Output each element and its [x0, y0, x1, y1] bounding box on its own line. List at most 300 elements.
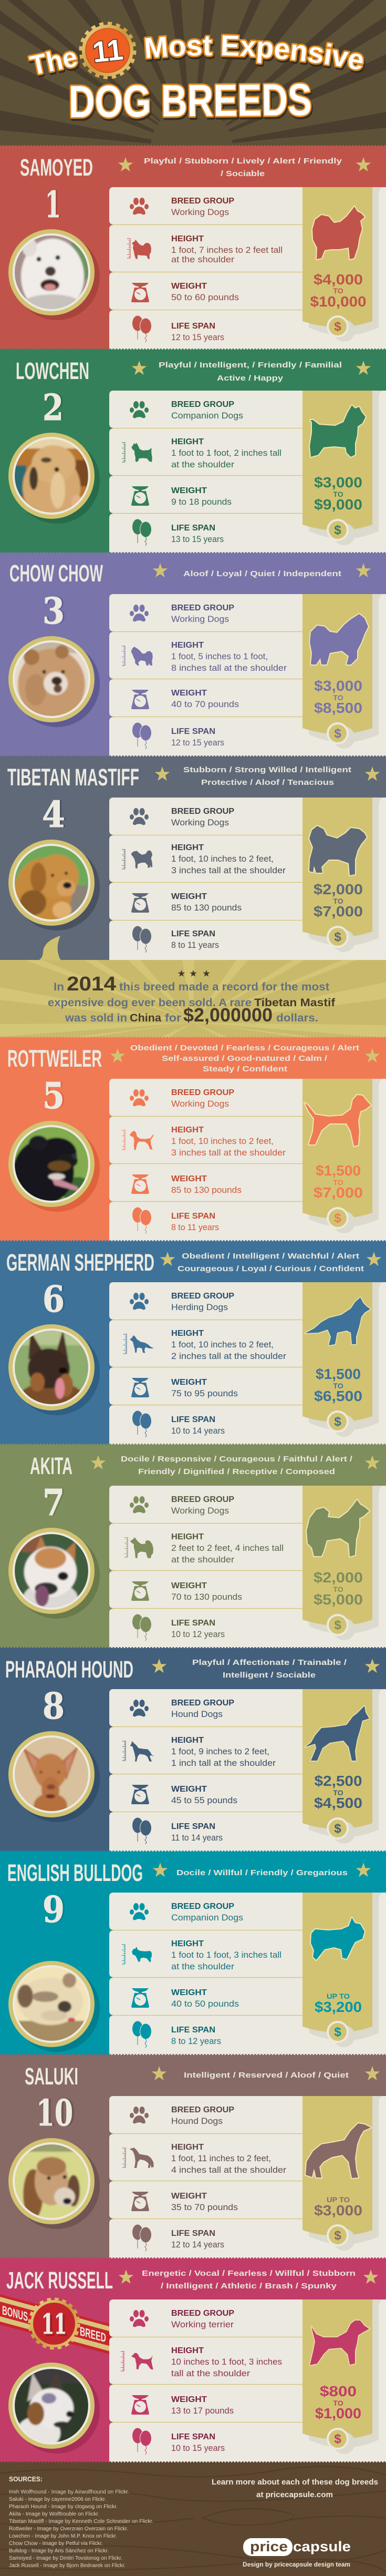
price: [314, 1162, 363, 1225]
price: $10,000: [310, 293, 367, 310]
section: Lowchen: [0, 350, 386, 559]
title: The 11 Most Expensive Dog Breeds: DOG BREEDS: [68, 75, 312, 127]
temperament traits: Self-assured / Good-natured / Calm /: [162, 1054, 328, 1063]
price: $: [334, 930, 341, 944]
learn more text: [212, 2478, 378, 2499]
weight: WEIGHT: [171, 486, 207, 495]
temperament traits: Intelligent / Reserved / Aloof / Quiet: [184, 2071, 349, 2080]
height: [171, 437, 281, 469]
price: [314, 678, 362, 741]
life span: 8 to 11 years: [171, 1223, 219, 1232]
temperament traits: [130, 1044, 359, 1074]
price: $4,000: [314, 271, 363, 288]
price: $: [334, 1211, 341, 1225]
rank number: 7: [43, 1482, 65, 1524]
icon: ruler and dog: [127, 238, 151, 259]
weight: 13 to 17 pounds: [171, 2406, 234, 2416]
star: [132, 361, 147, 375]
star: [356, 157, 371, 171]
sources list: [9, 2476, 153, 2569]
temperament traits: [121, 1455, 353, 1476]
height: HEIGHT: [171, 843, 204, 852]
section: Samoyed: [0, 146, 386, 355]
life span: LIFE SPAN: [171, 1415, 215, 1424]
star: [110, 1048, 125, 1062]
price: TO: [333, 1178, 343, 1187]
rank number: 6: [44, 1279, 66, 1321]
price: $5,000: [314, 1591, 363, 1608]
big dog silhouette: [310, 405, 366, 457]
callout: record sale fact: 2014: [67, 973, 116, 995]
icon: ruler and dog: [124, 1537, 153, 1558]
weight: [171, 486, 232, 507]
icon: scale: [131, 2192, 149, 2211]
logo: pricecapsule: capsule: [293, 2539, 351, 2554]
callout: record sale fact: Tibetan Mastif: [254, 997, 336, 1009]
price: $: [334, 1618, 341, 1632]
temperament traits: [142, 2269, 356, 2291]
callout: record sale fact: [0, 936, 386, 1041]
icon: balloons: [132, 722, 152, 749]
breed group: BREED GROUP: [171, 2105, 234, 2114]
price: [314, 2195, 362, 2243]
icon: ruler and dog: [122, 1130, 154, 1150]
temperament traits: Steady / Confident: [203, 1065, 287, 1074]
rank number: 8: [44, 1685, 66, 1727]
price: $7,000: [314, 903, 363, 919]
life span: [171, 2026, 221, 2046]
rank number: 3: [43, 590, 65, 632]
bonus breed ribbon: [0, 2294, 111, 2355]
section: English Bulldog: [0, 1852, 386, 2061]
icon: scale: [131, 283, 149, 302]
height: 2 feet to 2 feet, 4 inches tall: [171, 1543, 284, 1553]
height: 1 foot to 1 foot, 3 inches tall: [171, 1950, 281, 1960]
section: Saluki: [0, 2055, 386, 2264]
callout: record sale fact: China: [130, 1012, 161, 1024]
icon: paw: [130, 1700, 149, 1716]
weight: 45 to 55 pounds: [171, 1796, 237, 1805]
weight: [171, 2192, 238, 2212]
icon: paw: [130, 1496, 149, 1513]
star: [356, 1863, 371, 1877]
photo: Chow Chow: [8, 636, 100, 727]
weight: [171, 2395, 234, 2416]
icon: ruler and dog: [122, 1944, 152, 1964]
callout: record sale fact: dollars.: [276, 1012, 318, 1024]
temperament traits: Playful / Intelligent, / Friendly / Familial: [159, 361, 342, 370]
price: $3,000: [314, 2202, 362, 2219]
details card and price ribbon: [109, 187, 386, 355]
star: [365, 766, 380, 781]
breed name: ROTTWEILER: [7, 1045, 102, 1072]
star: [155, 766, 170, 781]
price: [314, 1569, 363, 1632]
sources list: Lowchen - Image by John M.P. Knox on Flickr.: [9, 2533, 117, 2539]
breed group: Hound Dogs: [171, 2117, 223, 2126]
icon: paw: [130, 2107, 149, 2123]
height: at the shoulder: [171, 1962, 235, 1971]
price: [310, 271, 367, 334]
life span: 12 to 15 years: [171, 738, 224, 748]
temperament traits: Docile / Responsive / Courageous / Faithful / Alert /: [121, 1455, 353, 1464]
height: HEIGHT: [171, 641, 204, 650]
life span: 12 to 14 years: [171, 2240, 224, 2250]
design credit: Design by pricecapsule design team: [243, 2562, 350, 2568]
temperament traits: Docile / Willful / Friendly / Gregarious: [176, 1868, 348, 1877]
icon: paw: [130, 1293, 149, 1310]
section: Jack Russell: [0, 2258, 386, 2468]
temperament traits: Intelligent / Sociable: [223, 1671, 316, 1680]
price: $6,500: [314, 1388, 362, 1404]
life span: LIFE SPAN: [171, 322, 215, 331]
icon: balloons: [132, 1818, 152, 1844]
photo: Akita: [8, 1528, 100, 1619]
price: TO: [333, 2399, 343, 2407]
photo: Saluki: [8, 2138, 100, 2229]
price: $2,000: [314, 881, 363, 897]
height: at the shoulder: [171, 255, 235, 264]
callout: record sale fact: $2,000000: [183, 1004, 273, 1026]
height: 1 foot, 10 inches to 2 feet,: [171, 1340, 274, 1350]
breed name: LOWCHEN: [16, 357, 89, 384]
weight: WEIGHT: [171, 1988, 207, 1997]
height: HEIGHT: [171, 2143, 204, 2152]
gold seal with rank 11: 11: [41, 2308, 67, 2340]
sources list: Bulldog - Image by Aris Sánchez on Flickr.: [9, 2548, 109, 2554]
rank number: 7: [44, 1482, 66, 1524]
callout: record sale fact: In: [54, 981, 64, 993]
temperament traits: Obedient / Intelligent / Watchful / Alert: [182, 1252, 359, 1261]
height: 1 foot, 7 inches to 2 feet tall: [171, 246, 283, 255]
life span: LIFE SPAN: [171, 1822, 215, 1831]
price: $: [334, 727, 341, 741]
photo: Rottweiler: [8, 1121, 100, 1212]
life span: LIFE SPAN: [171, 2026, 215, 2035]
photo: Samoyed: [8, 229, 100, 320]
breed group: Working terrier: [171, 2320, 234, 2329]
icon: scale: [131, 1581, 149, 1601]
height: 3 inches tall at the shoulder: [171, 1148, 286, 1158]
breed name: SAMOYED: [20, 154, 93, 181]
temperament traits: [159, 361, 342, 383]
height: HEIGHT: [171, 1939, 204, 1948]
star: [365, 1659, 380, 1673]
height: [171, 843, 286, 875]
height: 1 foot, 9 inches to 2 feet,: [171, 1747, 269, 1756]
rank number: 10: [36, 2092, 73, 2134]
icon: balloons: [132, 1207, 152, 1234]
breed group: Working Dogs: [171, 1506, 229, 1516]
star: [152, 1659, 166, 1673]
rank number: 8: [43, 1685, 65, 1727]
callout: record sale fact: for: [165, 1012, 181, 1024]
price: $4,500: [314, 1795, 362, 1811]
logo: pricecapsule: price: [250, 2539, 288, 2554]
callout: record sale fact: this breed made a record for the most: [119, 981, 329, 993]
weight: WEIGHT: [171, 2192, 207, 2201]
big dog silhouette: [311, 1918, 364, 1960]
breed group: BREED GROUP: [171, 197, 234, 206]
title: The 11 Most Expensive Dog Breeds: [27, 34, 366, 127]
weight: WEIGHT: [171, 689, 207, 698]
logo: pricecapsule: [243, 2538, 351, 2556]
height: [171, 234, 283, 264]
gold seal with rank 11: [30, 2299, 78, 2348]
star: [365, 1455, 380, 1469]
details card and price ribbon: [109, 1486, 386, 1654]
height: HEIGHT: [171, 234, 204, 243]
breed name: AKITA: [30, 1453, 72, 1479]
height: 2 inches tall at the shoulder: [171, 1352, 287, 1361]
life span: 13 to 15 years: [171, 535, 224, 544]
breed name: SALUKI: [25, 2063, 78, 2090]
breed group: [171, 1292, 234, 1312]
breed group: BREED GROUP: [171, 604, 234, 612]
big dog silhouette: [310, 2321, 369, 2365]
weight: WEIGHT: [171, 892, 207, 901]
breed group: [171, 197, 234, 217]
temperament traits: Active / Happy: [217, 374, 284, 383]
icon: scale: [131, 1378, 149, 1397]
weight: 85 to 130 pounds: [171, 903, 242, 913]
breed name: ENGLISH BULLDOG: [7, 1859, 143, 1886]
star: [153, 563, 168, 577]
big dog silhouette: [310, 614, 368, 665]
price: TO: [333, 490, 343, 498]
breed group: Hound Dogs: [171, 1710, 223, 1719]
icon: ruler and dog: [122, 442, 152, 462]
learn more text: Learn more about each of these dog breeds: [212, 2478, 378, 2487]
callout: record sale fact: was sold in: [65, 1012, 127, 1024]
icon: balloons: [132, 1411, 152, 1437]
temperament traits: [192, 1658, 347, 1680]
price: $1,500: [316, 1366, 361, 1382]
photo: English Bulldog: [8, 1961, 100, 2052]
breed group: [171, 1902, 243, 1923]
height: at the shoulder: [171, 460, 235, 469]
life span: LIFE SPAN: [171, 2229, 215, 2238]
height: HEIGHT: [171, 1329, 204, 1338]
gold seal with rank 11: 11: [44, 2311, 69, 2343]
temperament traits: / Sociable: [221, 169, 265, 178]
height: [171, 1329, 287, 1361]
photo: Lowchen: [8, 433, 100, 524]
star: [119, 2270, 133, 2284]
breed group: [171, 1699, 234, 1719]
icon: paw: [130, 808, 149, 825]
weight: WEIGHT: [171, 1581, 207, 1590]
callout: record sale fact: expensive dog ever been sold. A rare: [48, 997, 252, 1009]
weight: WEIGHT: [171, 2395, 207, 2404]
temperament traits: / Intelligent / Athletic / Brash / Spunky: [161, 2282, 337, 2291]
breed group: [171, 807, 234, 827]
weight: [171, 1174, 242, 1195]
weight: [171, 1785, 237, 1805]
icon: paw: [130, 1089, 149, 1106]
height: at the shoulder: [171, 1555, 235, 1565]
breed group: BREED GROUP: [171, 1088, 234, 1097]
rank number: 3: [44, 590, 66, 632]
big dog silhouette: [305, 1095, 371, 1146]
life span: LIFE SPAN: [171, 727, 215, 736]
breed group: BREED GROUP: [171, 807, 234, 816]
star: [152, 2066, 166, 2080]
section: Tibetan Mastiff: [0, 757, 386, 966]
sources list: Samoyed - Image by Dmitri Tovstonog on Flickr.: [9, 2555, 122, 2561]
life span: [171, 322, 224, 342]
icon: gold seal with number 11: [81, 24, 134, 77]
details card and price ribbon: [109, 594, 386, 762]
temperament traits: Friendly / Dignified / Receptive / Composed: [138, 1467, 335, 1476]
price: $2,500: [314, 1773, 362, 1789]
icon: paw: [130, 2310, 149, 2327]
height: HEIGHT: [171, 1736, 204, 1745]
big dog silhouette: [307, 1500, 369, 1557]
details card and price ribbon: [109, 1893, 386, 2061]
temperament traits: Energetic / Vocal / Fearless / Willful / Stubborn: [142, 2269, 356, 2278]
price: UP TO: [327, 2195, 350, 2204]
weight: WEIGHT: [171, 1785, 207, 1794]
price: UP TO: [327, 1992, 350, 2000]
weight: [171, 1988, 239, 2009]
details card and price ribbon: [109, 1689, 386, 1857]
breed group: Working Dogs: [171, 615, 229, 624]
icon: paw: [130, 198, 149, 214]
rank number: 9: [43, 1889, 65, 1931]
rank number: 1: [47, 184, 62, 226]
temperament traits: Courageous / Loyal / Curious / Confident: [178, 1264, 364, 1273]
star: [365, 2066, 380, 2080]
height: HEIGHT: [171, 1532, 204, 1541]
life span: LIFE SPAN: [171, 929, 215, 938]
life span: 10 to 14 years: [171, 1426, 225, 1436]
details card and price ribbon: [109, 2096, 386, 2264]
sources list: Saluki - Image by cayenne2006 on Flickr.: [9, 2497, 106, 2502]
big dog silhouette: [305, 1706, 369, 1761]
life span: 12 to 15 years: [171, 333, 224, 342]
icon: scale: [131, 2395, 149, 2415]
header background with sunburst rays: [0, 0, 386, 188]
icon: ruler and dog: [122, 849, 152, 869]
breed group: BREED GROUP: [171, 1495, 234, 1504]
breed group: Working Dogs: [171, 818, 229, 827]
price: $800: [320, 2383, 357, 2399]
life span: [171, 929, 219, 950]
title: The 11 Most Expensive Dog Breeds: The: [27, 42, 80, 81]
section: German Shepherd: [0, 1241, 386, 1450]
icon: balloons: [132, 315, 152, 342]
weight: WEIGHT: [171, 282, 207, 291]
icon: balloons: [132, 926, 152, 953]
weight: 75 to 95 pounds: [171, 1389, 238, 1398]
height: 1 inch tall at the shoulder: [171, 1759, 276, 1768]
star: [356, 361, 371, 375]
height: tall at the shoulder: [171, 2369, 251, 2378]
life span: 10 to 12 years: [171, 1630, 225, 1639]
bonus breed ribbon: BREED: [80, 2324, 106, 2345]
rank number: 5: [43, 1075, 65, 1117]
rank number: 9: [44, 1889, 66, 1931]
details card and price ribbon: [109, 391, 386, 559]
price: $3,000: [314, 678, 362, 694]
price: $: [334, 320, 341, 334]
weight: WEIGHT: [171, 1378, 207, 1387]
breed group: BREED GROUP: [171, 400, 234, 409]
height: 1 foot, 10 inches to 2 feet,: [171, 1137, 274, 1146]
star: [153, 1863, 168, 1877]
breed name: TIBETAN MASTIFF: [7, 764, 139, 791]
height: [171, 2143, 287, 2175]
life span: 10 to 15 years: [171, 2444, 225, 2453]
life span: [171, 1212, 219, 1232]
big dog silhouette: [306, 2123, 371, 2178]
price: [315, 2383, 361, 2446]
title: The 11 Most Expensive Dog Breeds: Most Expensive: [144, 34, 366, 73]
icon: scale: [131, 1988, 149, 2008]
price: TO: [333, 1788, 343, 1797]
details card and price ribbon: [109, 798, 386, 966]
height: [171, 2346, 282, 2378]
price: $8,500: [314, 700, 362, 716]
price: $: [334, 1415, 341, 1429]
height: [171, 1532, 284, 1565]
icon: ruler and dog: [121, 2351, 153, 2371]
sources list: Akita - Image by Wolftrouble on Flickr.: [9, 2511, 99, 2517]
star: [367, 1252, 381, 1266]
weight: [171, 282, 239, 302]
price: TO: [333, 693, 343, 702]
icon: balloons: [132, 2428, 152, 2455]
icon: ruler and dog: [122, 646, 153, 666]
temperament traits: Protective / Aloof / Tenacious: [201, 778, 334, 787]
rank number: 2: [43, 387, 64, 429]
icon: paw: [130, 1903, 149, 1920]
breed name: GERMAN SHEPHERD: [6, 1249, 154, 1276]
height: HEIGHT: [171, 437, 204, 446]
sources list: Rottweiler - Image by Overzrain Overzain on Flickr.: [9, 2526, 128, 2532]
breed name: JACK RUSSELL: [6, 2267, 113, 2294]
icon: scale: [131, 893, 149, 913]
price: $: [334, 2229, 341, 2243]
price: $: [334, 1822, 341, 1836]
life span: [171, 727, 224, 748]
weight: 50 to 60 pounds: [171, 293, 239, 302]
rank number: 4: [44, 794, 67, 836]
price: $3,000: [314, 474, 362, 490]
temperament traits: Playful / Stubborn / Lively / Alert / Friendly: [144, 157, 342, 166]
price: $9,000: [314, 496, 362, 513]
footer wood panel: [0, 2462, 386, 2576]
rank number: 2: [44, 387, 65, 429]
breed name: CHOW CHOW: [9, 560, 103, 587]
big dog silhouette: [305, 1297, 370, 1345]
breed group: [171, 604, 234, 624]
life span: LIFE SPAN: [171, 1619, 215, 1628]
icon: gold seal with number 11: 11: [91, 33, 124, 69]
breed group: [171, 2309, 234, 2329]
life span: LIFE SPAN: [171, 1212, 215, 1221]
rank number: 1: [45, 184, 61, 226]
weight: 85 to 130 pounds: [171, 1185, 242, 1195]
section: Akita: [0, 1445, 386, 1654]
icon: balloons: [132, 1614, 152, 1641]
icon: scale: [131, 486, 149, 506]
details card and price ribbon: [109, 1282, 386, 1450]
life span: LIFE SPAN: [171, 2432, 215, 2441]
section: Rottweiler: [0, 1038, 386, 1247]
price: $: [334, 523, 341, 537]
